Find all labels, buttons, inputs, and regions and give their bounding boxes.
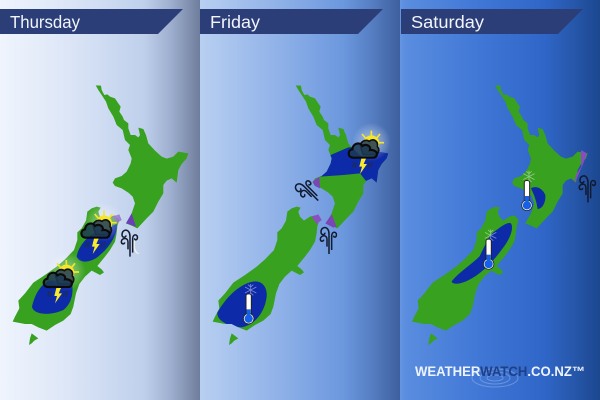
wind warning: Wellington: [126, 213, 136, 227]
panel: Friday: [200, 0, 400, 400]
wind warning: Wellington: [325, 214, 337, 228]
icon: storm south: [44, 252, 86, 303]
banner: [401, 9, 583, 34]
map of New Zealand: [13, 85, 188, 345]
icon: cold thermometer: [243, 284, 256, 324]
icon: cold thermometer north: [521, 171, 535, 211]
panel background: [0, 0, 200, 400]
icon: storm north: [81, 203, 123, 254]
rain area: Southland: [217, 281, 267, 327]
map of New Zealand: [213, 85, 400, 345]
icon: wind: [121, 230, 137, 257]
panel background: [200, 0, 400, 400]
icon: storm: [349, 123, 391, 174]
wind warning: Marlborough: [312, 214, 322, 224]
panel: Saturday: [400, 0, 600, 400]
wind warning: East Cape: [574, 150, 587, 183]
map of New Zealand: [412, 85, 595, 345]
banner: Saturday: [411, 12, 484, 32]
logo: WeatherWatch: [415, 364, 585, 387]
icon: wind: [579, 176, 595, 202]
wind warning: Taranaki: [313, 177, 320, 188]
banner: Friday: [210, 12, 260, 32]
panel background: [400, 0, 600, 400]
icon: wind south: [320, 227, 336, 254]
rain area: northern South Island: [77, 224, 117, 262]
icon: cold thermometer south: [483, 229, 496, 270]
banner: [0, 9, 183, 34]
wind warning: Marlborough: [112, 214, 122, 223]
banner: [200, 9, 383, 34]
panel: Thursday: [0, 0, 200, 400]
rain area: upper North Island: [320, 147, 388, 182]
icon: crescent: [133, 238, 140, 254]
banner: Thursday: [10, 12, 80, 32]
icon: wind west: [293, 177, 324, 207]
cold area: Southern Alps: [452, 223, 512, 284]
cold area: central North Island: [531, 187, 545, 209]
rain area: southern South Island: [32, 280, 73, 314]
logo: WeatherWatch: WEATHERWATCH.CO.NZ™: [415, 364, 585, 379]
